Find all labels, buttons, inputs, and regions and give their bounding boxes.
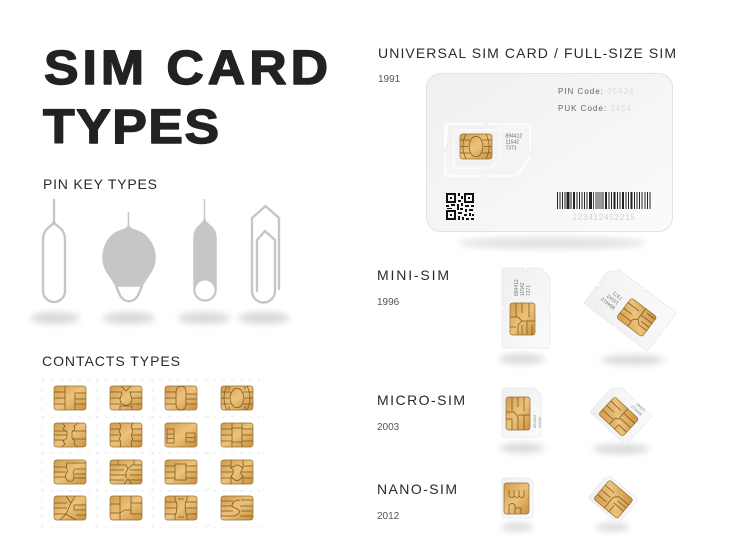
year 2003: 2003 xyxy=(377,422,400,433)
year 1991: 1991 xyxy=(378,74,401,85)
contact chip 10 xyxy=(110,460,142,484)
pin key: paperclip xyxy=(238,206,290,324)
heading: micro-sim: MICRO-SIM xyxy=(377,392,465,408)
mini-sim rotated xyxy=(584,265,676,365)
contact chip 11 xyxy=(165,460,197,484)
contact chip 5 xyxy=(54,423,86,447)
chip xyxy=(460,134,492,159)
contact chip 1 xyxy=(54,386,86,410)
mini-sim front xyxy=(499,268,550,364)
pin key: teardrop xyxy=(103,212,155,324)
heading: pin key types: PIN KEY TYPES xyxy=(43,176,157,192)
codes: PUK Code: 3454 xyxy=(558,104,632,113)
panel: full-size sim card xyxy=(426,74,672,249)
pin key: filled with hole xyxy=(178,199,230,324)
heading: contacts types: CONTACTS TYPES xyxy=(42,353,180,369)
micro-sim rotated: 894412 xyxy=(629,404,643,417)
contact chip 12 xyxy=(221,460,253,484)
heading: universal sim: UNIVERSAL SIM CARD / FULL-SIZE SIM xyxy=(378,45,676,61)
contact chip 4 xyxy=(221,386,253,410)
mini-sim front: 11542 xyxy=(520,282,526,296)
mini-sim front: 894412 xyxy=(514,279,520,296)
serial: 7371 xyxy=(506,146,517,152)
barcode xyxy=(557,192,650,209)
micro-sim front: 11542 xyxy=(537,416,542,428)
contact chip 16 xyxy=(221,496,253,520)
serial: 894412 xyxy=(506,134,522,140)
qr code xyxy=(446,193,474,220)
codes: PIN Code: 05424 xyxy=(558,87,634,96)
heading: mini-sim: MINI-SIM xyxy=(377,267,449,283)
contact chip 6 xyxy=(110,423,142,447)
year 1996: 1996 xyxy=(377,297,400,308)
micro-sim rotated: 11542 xyxy=(634,402,646,413)
title xyxy=(43,41,328,154)
pin key: oval loop xyxy=(30,200,80,324)
year 2012: 2012 xyxy=(377,511,400,522)
title: TYPES xyxy=(43,100,219,154)
serial xyxy=(506,134,522,152)
serial: 11542 xyxy=(506,140,519,146)
contact chip 3 xyxy=(165,386,197,410)
nano-sim front xyxy=(501,478,533,531)
codes xyxy=(558,87,634,113)
contact chip 8 xyxy=(221,423,253,447)
panel: pin keys xyxy=(30,199,290,324)
micro-sim rotated xyxy=(590,382,653,454)
sim cut-out outline xyxy=(445,124,530,176)
contact chip 2 xyxy=(110,386,142,410)
contact chip 13 xyxy=(54,496,86,520)
nano-sim rotated xyxy=(588,474,638,531)
micro-sim front: 894412 xyxy=(532,414,537,428)
mini-sim rotated: 894412 xyxy=(600,295,617,310)
contact chip 14 xyxy=(110,496,142,520)
micro-sim front xyxy=(500,388,544,453)
contact chip 9 xyxy=(54,460,86,484)
mini-sim rotated: 11542 xyxy=(606,293,620,306)
panel: contact grid xyxy=(42,380,264,528)
contact chip 15 xyxy=(165,496,197,520)
barcode digits: 123412452215 xyxy=(572,213,636,222)
title: SIM CARD xyxy=(44,41,328,95)
contact chip 7 xyxy=(165,423,197,447)
mini-sim front: 7371 xyxy=(526,285,532,296)
heading: nano-sim: NANO-SIM xyxy=(377,481,457,497)
mini-sim rotated: 7371 xyxy=(611,289,624,301)
